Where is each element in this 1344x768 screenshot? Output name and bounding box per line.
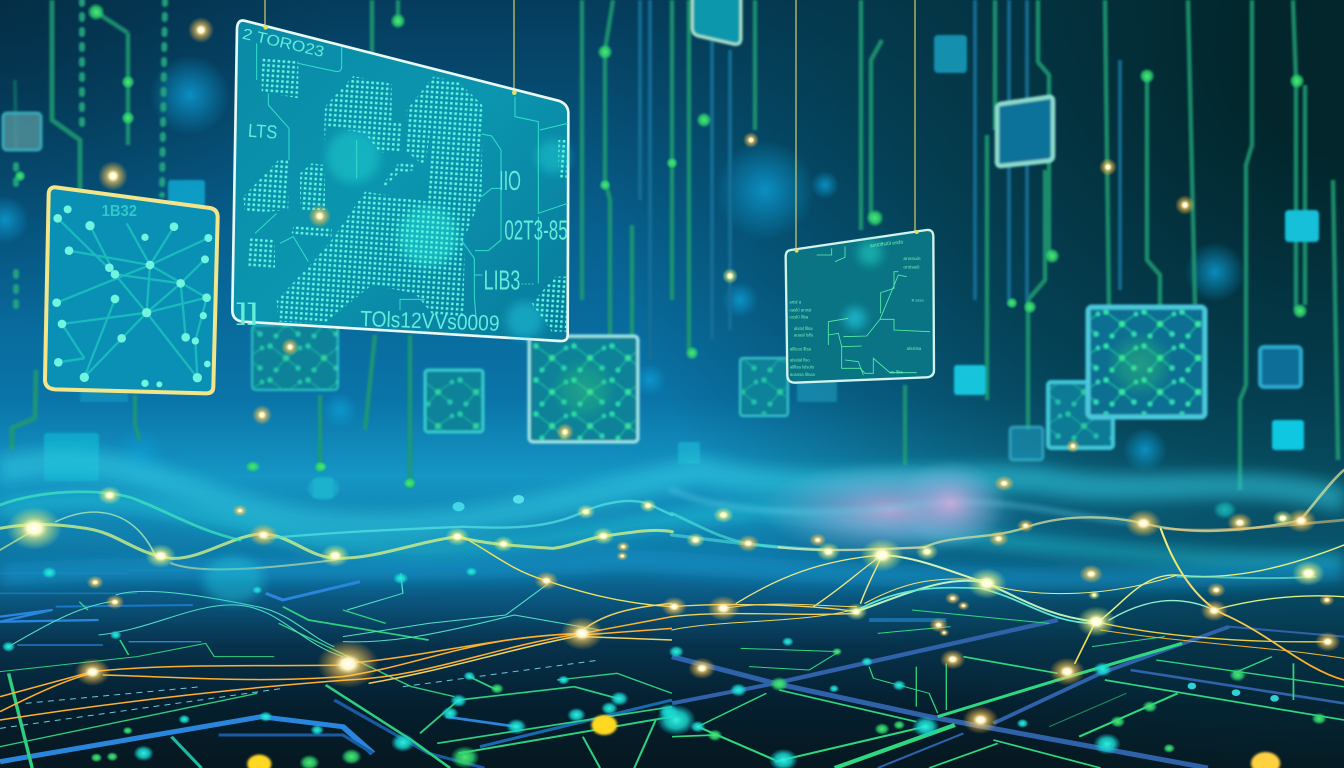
- dotted map region: [243, 57, 567, 332]
- upper green and amber nodes: [14, 3, 1308, 489]
- small panel micro text: artsl a: [789, 299, 802, 304]
- small panel micro text: [789, 239, 924, 377]
- panel text: LTS: [247, 120, 278, 143]
- teal thin wires: [9, 573, 600, 657]
- panel text: IIO: [499, 165, 521, 196]
- panel text: ]]: [236, 299, 258, 326]
- small glow on panel: [308, 205, 331, 227]
- small panel micro text: aosssa lllsoa: [790, 372, 815, 377]
- green traces: [672, 610, 1344, 768]
- wave haze: [672, 490, 1143, 550]
- blue bus traces: [0, 570, 672, 768]
- orange wire bundle: [0, 603, 672, 720]
- bright glow nodes: [661, 460, 1341, 768]
- panel: left network map: [45, 187, 218, 393]
- glow spots on small panel: [844, 241, 882, 329]
- panel text: 2 TORO23: [241, 26, 326, 61]
- panel: small circuit map: [786, 230, 934, 383]
- small panel micro text: oosl0 lllsa: [789, 314, 809, 319]
- small floating squares: [3, 35, 1319, 498]
- pink haze highlight: [760, 462, 1020, 558]
- small panel micro text: alss0sa: [907, 346, 922, 351]
- network graph lines: [57, 218, 208, 378]
- circuit board floor right: [657, 460, 1344, 768]
- floor glow nodes: [657, 501, 1327, 768]
- small panel micro text: aoaal lslls: [794, 333, 813, 338]
- panel text: 02T3-85: [504, 214, 568, 245]
- glass panel square top: [692, 0, 741, 44]
- panel: large map: [232, 20, 570, 341]
- panel label: 1B32: [102, 203, 137, 220]
- background bokeh glows: [0, 55, 1245, 481]
- circuit traces on small panel: [817, 247, 930, 375]
- small panel micro text: oasl0 annst: [789, 308, 812, 313]
- circuit board floor left: [0, 461, 679, 768]
- small panel micro text: alsslal llso: [790, 358, 810, 363]
- blue bus traces: [672, 620, 1344, 768]
- network graph nodes: [52, 205, 212, 387]
- hanging wires: [265, 0, 915, 250]
- small panel micro text: aott0ffsl0l esda: [870, 239, 904, 249]
- vertical circuit traces: [12, 0, 1338, 490]
- green traces: [0, 602, 672, 768]
- floating wave bands: [0, 462, 1344, 579]
- small panel wire joints: [795, 230, 919, 253]
- small panel micro text: anssuin: [903, 256, 921, 262]
- glass panel square upper right: [997, 97, 1053, 166]
- panel text: [236, 26, 568, 336]
- small panel micro text: as lllss: [890, 369, 903, 374]
- panel text: TOls12VVs0009: [360, 306, 500, 336]
- bright glow nodes: [6, 486, 657, 768]
- small panel micro text: alxtsl lllsa: [794, 326, 813, 331]
- circuit traces on panel: [255, 43, 568, 327]
- panel wire joints: [263, 25, 517, 95]
- panel text: LIB3: [484, 264, 520, 295]
- glow spots on panel: [327, 130, 570, 338]
- glass panel squares with green speckle: [252, 307, 1205, 448]
- small panel micro text: lll sssa: [912, 297, 924, 302]
- dashed traces: [0, 660, 600, 728]
- small panel micro text: allllsa lslsolo: [790, 364, 815, 369]
- floor glow nodes: [2, 461, 679, 768]
- yellow-green waves: [0, 492, 672, 607]
- yellow and orange wires: [672, 470, 1344, 680]
- small panel micro text: alllsoo lllsa: [790, 347, 812, 352]
- small panel micro text: orslsa0: [903, 264, 920, 270]
